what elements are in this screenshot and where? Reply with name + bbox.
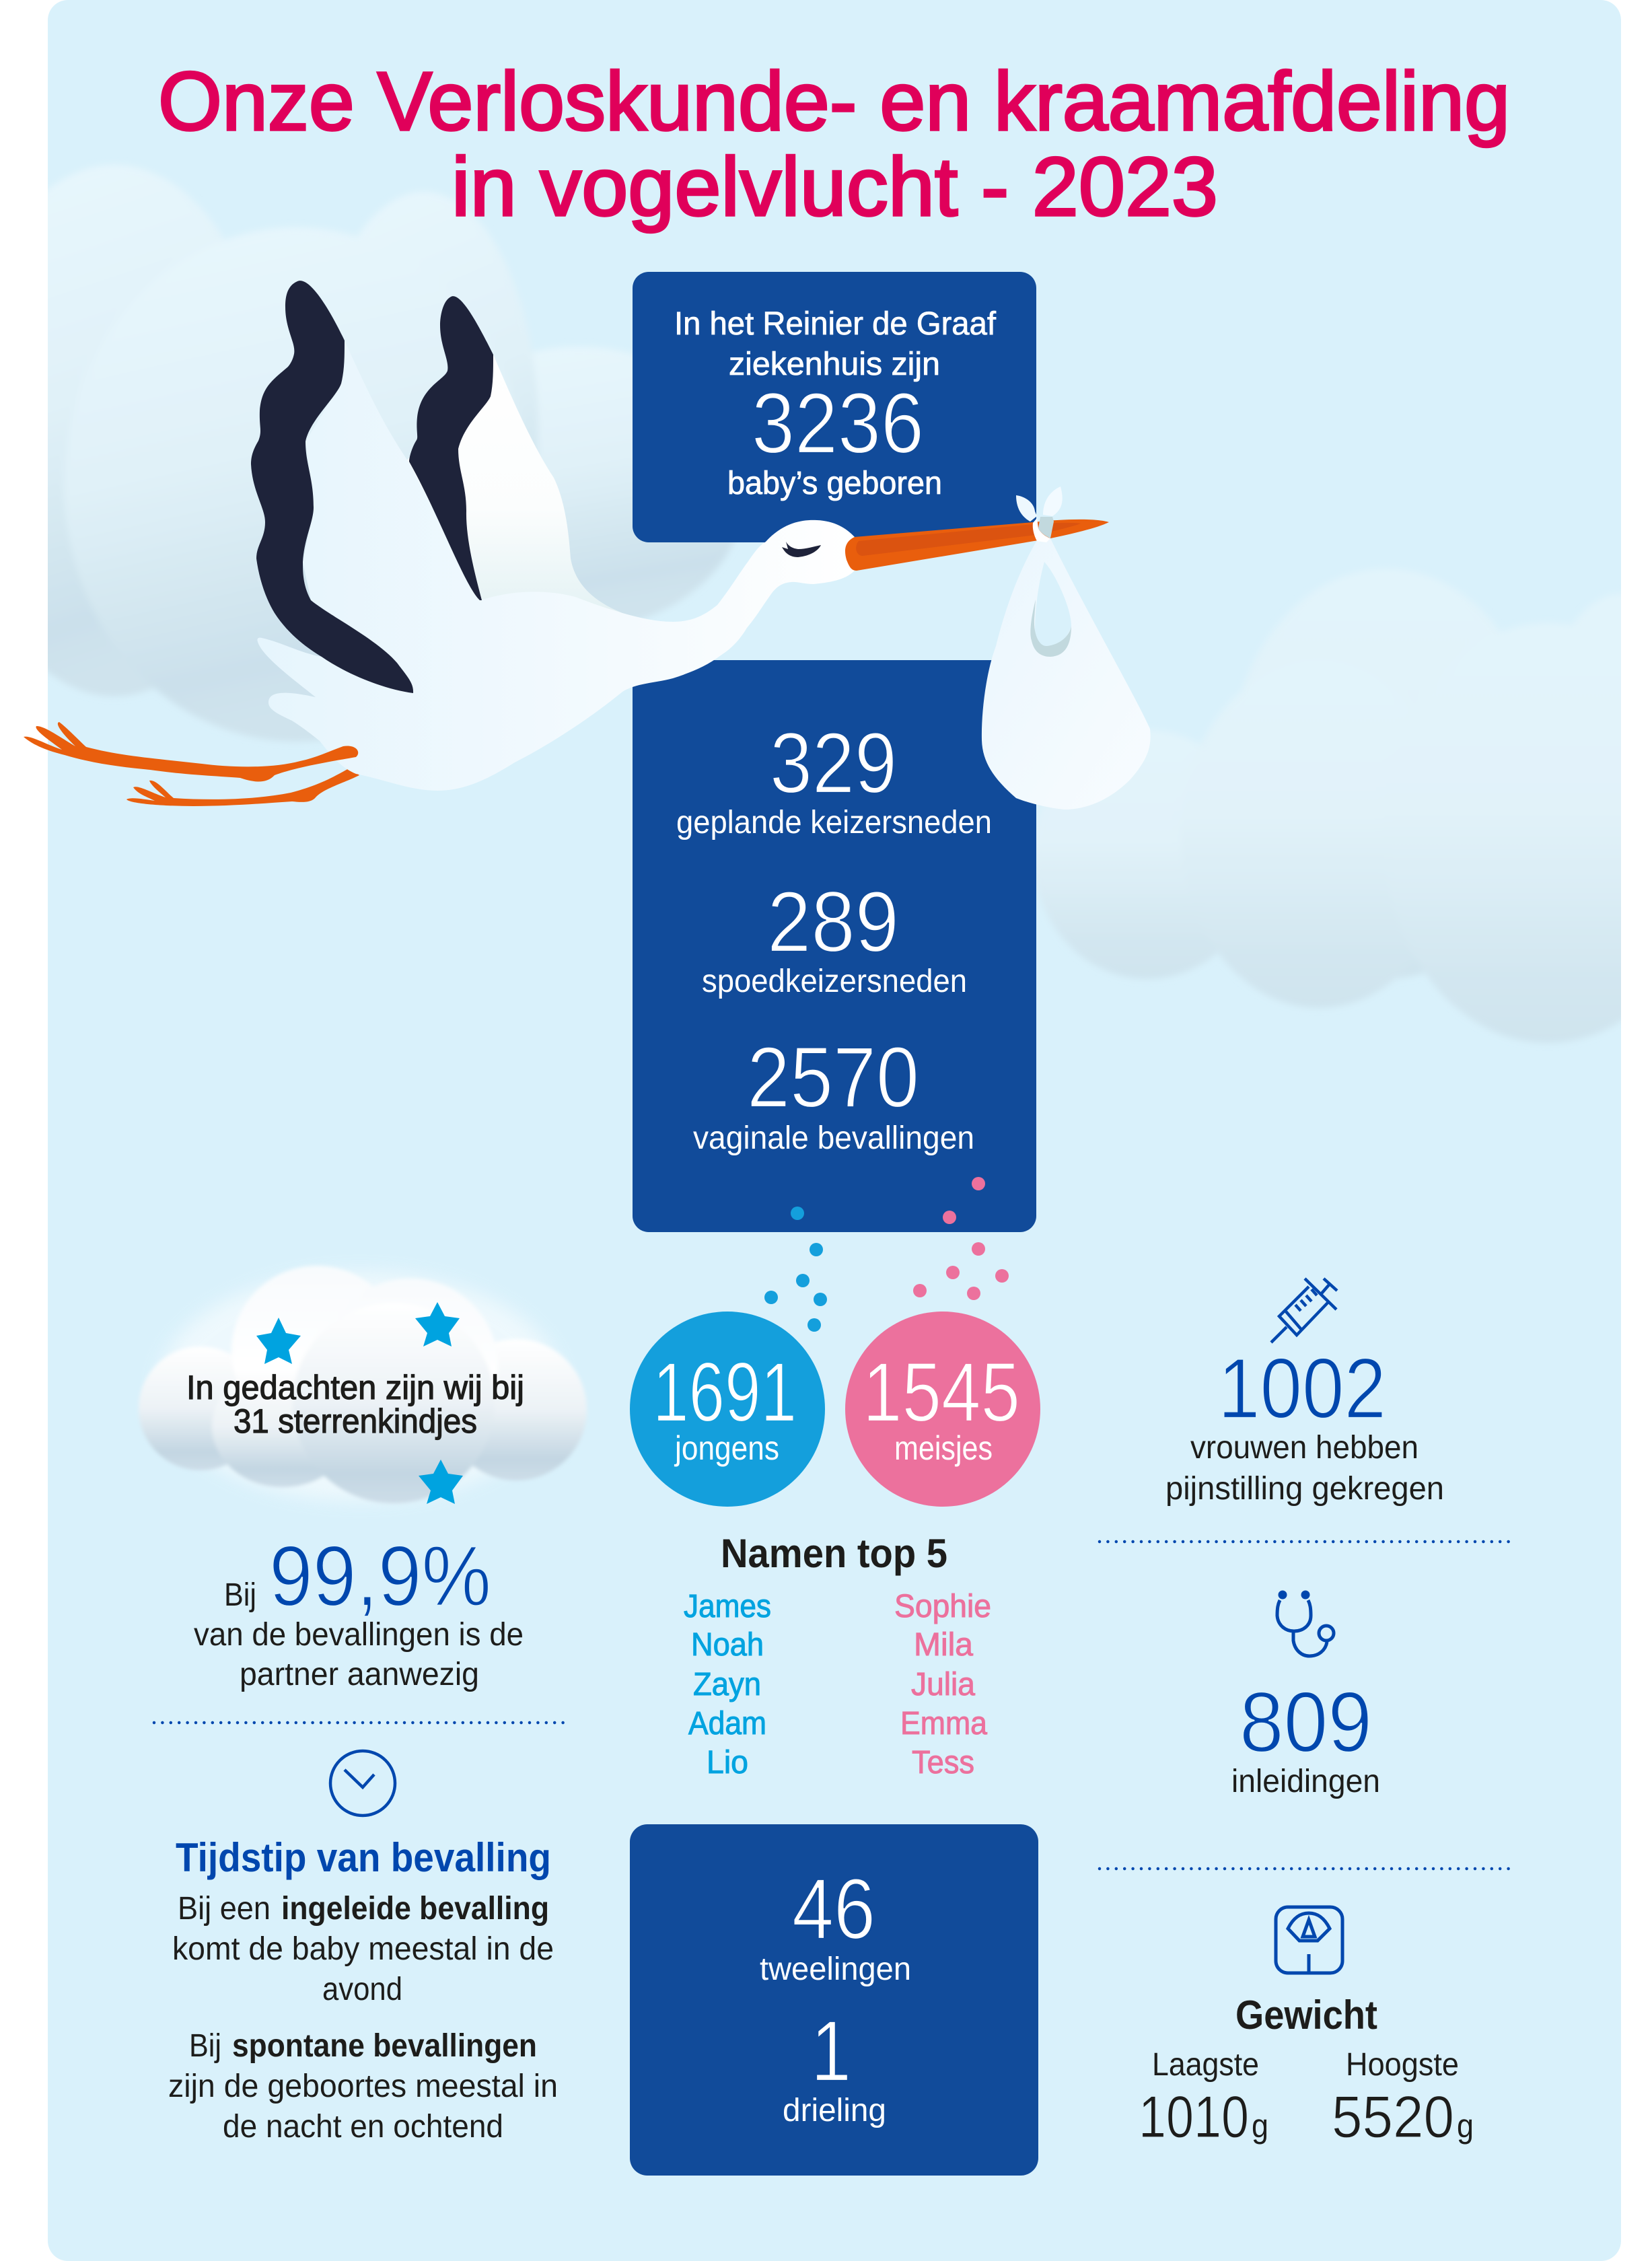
boys names list: Adam — [688, 1706, 766, 1742]
text: spontaneous labour: zijn de geboortes meestal in — [168, 2069, 558, 2104]
stat: inductions: 809 — [1240, 1674, 1372, 1770]
text: induced labour: avond — [322, 1972, 402, 2007]
weight section — [1139, 1993, 1474, 2150]
title: Onze Verloskunde- en kraamafdeling — [158, 56, 1510, 148]
stork near wing black feathers — [251, 281, 413, 693]
boys names list — [684, 1589, 771, 1781]
stat: inductions: inleidingen — [1231, 1764, 1380, 1799]
stork rear leg — [127, 768, 359, 806]
icon: stethoscope — [1277, 1592, 1334, 1656]
girls names list: Mila — [914, 1627, 973, 1663]
text: induced labour: Bij een — [178, 1891, 271, 1927]
cloud with star children — [139, 1266, 587, 1504]
stat: twins: 46 — [792, 1861, 875, 1958]
stat: partner present: partner aanwezig — [240, 1657, 479, 1692]
icon: clock — [330, 1751, 395, 1816]
stat: pain relief: pijnstilling gekregen — [1165, 1471, 1444, 1507]
boys circle: 1691 — [653, 1346, 797, 1439]
text: spontaneous labour — [168, 2028, 558, 2145]
stat: pain relief: 1002 — [1218, 1340, 1386, 1436]
heading: weight: Gewicht — [1235, 1993, 1377, 2038]
number: 3236: 3236 — [752, 375, 924, 472]
stat: planned caesareans — [676, 715, 992, 840]
text: induced labour: komt de baby meestal in de — [172, 1931, 554, 1967]
stat: emergency caesareans — [702, 874, 967, 999]
stat: highest weight: 5520 — [1332, 2083, 1454, 2150]
icon: star 2 — [415, 1302, 460, 1347]
heading: top names: Namen top 5 — [721, 1531, 947, 1576]
panel: delivery types — [633, 660, 1036, 1232]
stat: triplets: 1 — [811, 2003, 851, 2100]
text: induced labour: ingeleide bevalling — [281, 1891, 549, 1927]
boys names list: Noah — [691, 1627, 764, 1663]
boys names list: Zayn — [693, 1667, 761, 1702]
stat: twins — [760, 1861, 911, 1987]
girls circle — [845, 1312, 1040, 1507]
stat: pain relief — [1165, 1340, 1444, 1507]
boys circle: jongens — [674, 1429, 779, 1467]
intro text — [674, 306, 997, 382]
stat: twins: tweelingen — [760, 1951, 911, 1987]
cloud text: 31 sterrenkindjes — [234, 1402, 477, 1440]
stat: partner present: van de bevallingen is de — [194, 1617, 524, 1653]
cloud text — [186, 1369, 524, 1440]
stat: lowest weight: g — [1252, 2107, 1268, 2145]
stat: triplets: drieling — [783, 2093, 886, 2128]
stork far wing — [404, 355, 622, 613]
text: induced labour — [172, 1891, 554, 2007]
girls circle: meisjes — [894, 1429, 993, 1467]
stat: vaginal births — [693, 1030, 974, 1156]
stork body, neck and head — [257, 340, 855, 791]
stat: partner present — [194, 1528, 524, 1692]
stork front leg — [24, 722, 358, 782]
pink confetti dots — [913, 1177, 1009, 1300]
boys names list: Lio — [707, 1745, 748, 1781]
icon: star 3 — [419, 1460, 463, 1504]
stat: emergency caesareans: 289 — [767, 874, 899, 970]
stork illustration — [24, 281, 1151, 810]
cloud: upper left — [0, 165, 747, 742]
stat: highest weight: Hoogste — [1346, 2047, 1459, 2083]
stat: lowest weight: 1010 — [1139, 2083, 1249, 2150]
icon: scale — [1276, 1907, 1342, 1973]
stat: lowest weight: Laagste — [1152, 2047, 1259, 2083]
panel: twins and triplets — [630, 1824, 1038, 2176]
girls names list: Sophie — [894, 1589, 991, 1624]
label: babies born: baby’s geboren — [727, 466, 942, 501]
stat: vaginal births: 2570 — [747, 1030, 919, 1126]
icon: star 1 — [256, 1318, 301, 1364]
girls circle: 1545 — [863, 1346, 1020, 1439]
bundle knot — [1016, 487, 1063, 542]
cloud: lower right — [1033, 569, 1652, 1043]
stat: planned caesareans: geplande keizersneden — [676, 805, 992, 840]
stat: partner present: 99,9% — [269, 1528, 491, 1624]
girls names list: Julia — [911, 1667, 975, 1702]
title: in vogelvlucht - 2023 — [452, 141, 1218, 234]
text: spontaneous labour: Bij — [189, 2028, 221, 2064]
stat: planned caesareans: 329 — [770, 715, 897, 812]
icon: syringe — [1271, 1279, 1337, 1342]
stat: triplets — [783, 2003, 886, 2128]
stork far wing black feathers — [409, 296, 493, 600]
stat: lowest weight — [1139, 2047, 1268, 2150]
bundle fold shadow — [1030, 600, 1071, 657]
text: spontaneous labour: de nacht en ochtend — [223, 2109, 503, 2145]
girls names list — [894, 1589, 991, 1781]
girls names list: Emma — [900, 1706, 987, 1742]
intro text: In het Reinier de Graaf — [674, 306, 997, 342]
blue confetti dots — [764, 1207, 827, 1332]
stat: pain relief: vrouwen hebben — [1190, 1430, 1418, 1466]
stork eye — [782, 542, 821, 557]
panel: total births — [633, 272, 1036, 542]
text: spontaneous labour: spontane bevallingen — [232, 2028, 537, 2064]
title — [158, 56, 1510, 234]
stat: highest weight: g — [1457, 2107, 1474, 2145]
stork beak — [845, 519, 1109, 571]
girls names list: Tess — [912, 1745, 974, 1781]
boys names list: James — [684, 1589, 771, 1624]
stat: partner present: Bij — [224, 1577, 256, 1613]
boys circle — [630, 1312, 825, 1507]
small cloud puffs — [139, 1266, 587, 1503]
stat: emergency caesareans: spoedkeizersneden — [702, 964, 967, 999]
baby bundle — [982, 487, 1151, 810]
cloud text: In gedachten zijn wij bij — [186, 1369, 524, 1406]
bundle sack — [982, 538, 1151, 810]
heading: time of delivery: Tijdstip van bevalling — [176, 1835, 551, 1880]
background clouds — [0, 165, 1652, 1043]
stat: vaginal births: vaginale bevallingen — [693, 1120, 974, 1156]
stat: highest weight — [1332, 2047, 1474, 2150]
intro text: ziekenhuis zijn — [729, 347, 940, 382]
